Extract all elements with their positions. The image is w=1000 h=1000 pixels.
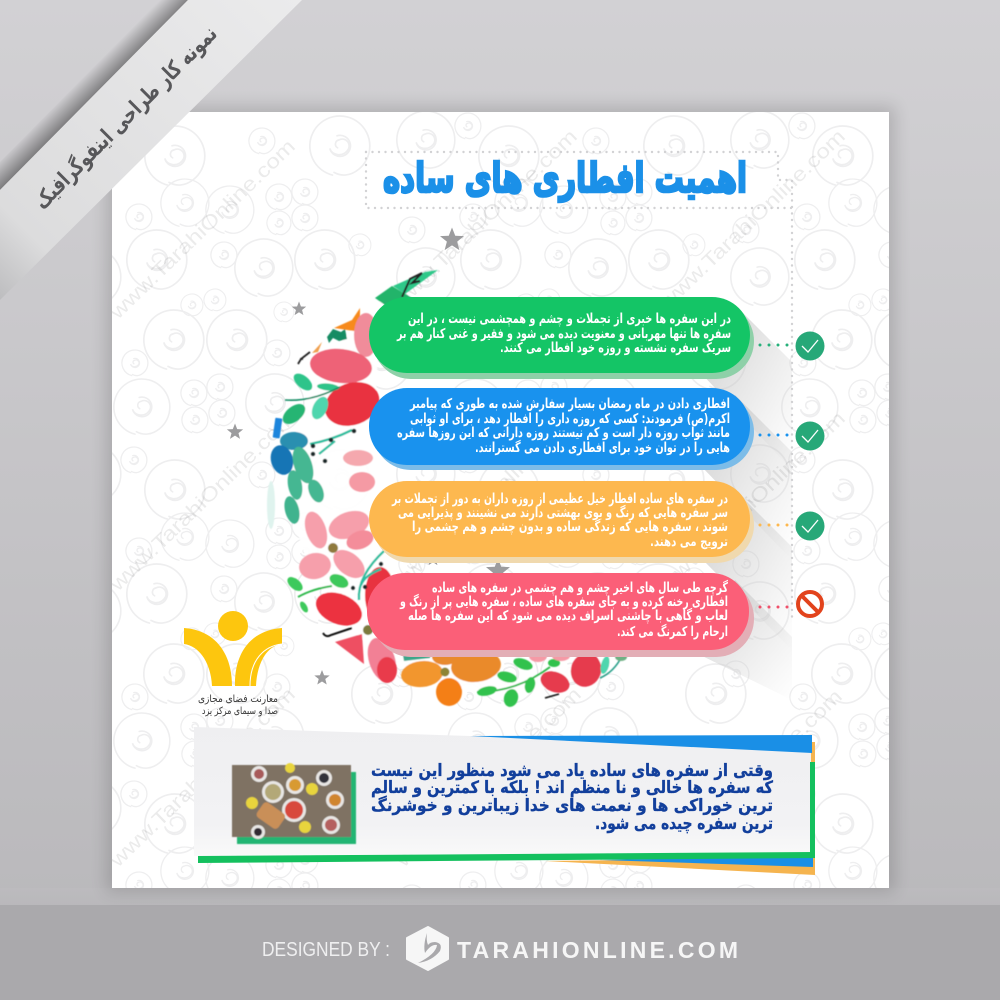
logo caption: معارنت فضای مجازی: [198, 694, 278, 705]
title: اهمیت افطاری های ساده: [383, 154, 747, 202]
watermarks: www.TarahiOnline.com: [387, 407, 582, 596]
watermarks: www.TarahiOnline.com: [655, 125, 850, 314]
flowers top: [279, 308, 385, 463]
food photo: [232, 763, 356, 844]
banner ribbons: lower: [198, 852, 815, 875]
pink flower: [298, 510, 374, 580]
pill: green: [369, 297, 754, 379]
long pill shadows: [704, 313, 792, 686]
site name: TARAHIONLINE.COM: [457, 937, 738, 963]
pill: green: سریک سفره نشسته و روزه خود افطار می کنند.: [500, 340, 731, 356]
icon: check 2: [796, 422, 824, 450]
watermarks: www.TarahiOnline.com: [387, 125, 582, 314]
organization logo: [184, 611, 282, 717]
bottom flowers: [400, 656, 628, 708]
icon: check 3: [796, 512, 824, 540]
pill: green: در این سفره ها خبری از تجملات و چشم و همچشمی نیست ، در این: [408, 311, 731, 327]
pill: blue: [369, 388, 754, 470]
pill: pink: [367, 573, 754, 657]
icon: prohibited: [798, 592, 822, 616]
banner text: وقتی از سفره های ساده یاد می شود منظور این نیست: [371, 761, 773, 781]
organization logo: صدا و سیمای مرکز یزد: [202, 706, 278, 717]
pill: yellow: [369, 481, 754, 563]
watermarks: www.TarahiOnline.com: [105, 135, 300, 324]
content card: [105, 112, 889, 888]
stars: [227, 228, 510, 684]
bottom banner: [194, 727, 815, 875]
banner ribbon: blue: [470, 735, 812, 753]
pill: blue: مانند ثواب روزه دار است و کم نیستند روزه دارانی که این روزها سفره: [397, 425, 730, 441]
icon: hexagon logo: [407, 927, 448, 970]
dotted frame: [366, 152, 792, 620]
pill: green: سفره ها تنها مهربانی و معنویت دیده می شود و فقیر و غنی کنار هم بر: [396, 326, 731, 342]
designed by label: DESIGNED BY :: [262, 939, 390, 961]
banner text: که سفره ها خالی و نا منظم اند ! بلکه با کمترین و سالم: [371, 778, 773, 798]
pill: blue: هایی را در توان خود برای افطاری دادن می گسترانند.: [475, 439, 730, 456]
lower left flowers: [285, 550, 401, 686]
top leaf: [375, 270, 438, 305]
watermarks: www.TarahiOnline.com: [655, 407, 850, 596]
blue flower and teal leaves: [267, 418, 327, 529]
pill: yellow: ترویج می دهند.: [650, 534, 728, 550]
banner text: [371, 761, 773, 834]
watermarks: www.TarahiOnline.com: [652, 685, 847, 874]
connector dots: [760, 345, 788, 607]
banner text: ترین خوراکی ها و نعمت های خدا زیباترین و خوشرنگ: [371, 795, 773, 816]
watermarks: www.TarahiOnline.com: [391, 683, 586, 872]
footer credit: [262, 927, 738, 970]
watercolor floral crescent: [267, 270, 632, 709]
banner text: ترین سفره چیده می شود.: [595, 814, 773, 834]
watermarks: www.TarahiOnline.com: [105, 683, 300, 872]
icon: check 1: [796, 332, 824, 360]
pill: yellow: سر سفره هایی که رنگ و بوی بهشتی دارند می نشینند و پذیرایی می: [398, 504, 728, 521]
corner ribbon: [0, 0, 302, 300]
pill: yellow: در سفره های ساده افطار خیل عظیمی از روزه داران به دور از تجملات بر: [391, 491, 728, 507]
pill: blue: افطاری دادن در ماه رمضان بسیار سفارش شده به طوری که پیامبر: [409, 396, 730, 412]
pill: pink: گرچه طی سال های اخیر چشم و هم چشمی در سفره های ساده: [432, 579, 728, 596]
pale pink petals: [343, 450, 375, 492]
pill: pink: افطاری رخنه کرده و به جای سفره های ساده ، سفره هایی پر از رنگ و: [399, 593, 728, 610]
pill: pink: ارحام را کمرنگ می کند.: [617, 623, 728, 640]
pill: yellow: شوند ، سفره هایی که زندگی ساده و بدون چشم و هم چشمی را: [412, 518, 728, 535]
pill: blue: اکرم(ص) فرمودند: کسی که روزه داری را افطار دهد ، برای او ثوابی: [410, 411, 730, 427]
pill: pink: لعاب و گاهی با چاشنی اسراف دیده می شود که این سفره ها صله: [408, 607, 728, 624]
watermarks: [105, 125, 850, 874]
watermarks: www.TarahiOnline.com: [105, 407, 300, 596]
